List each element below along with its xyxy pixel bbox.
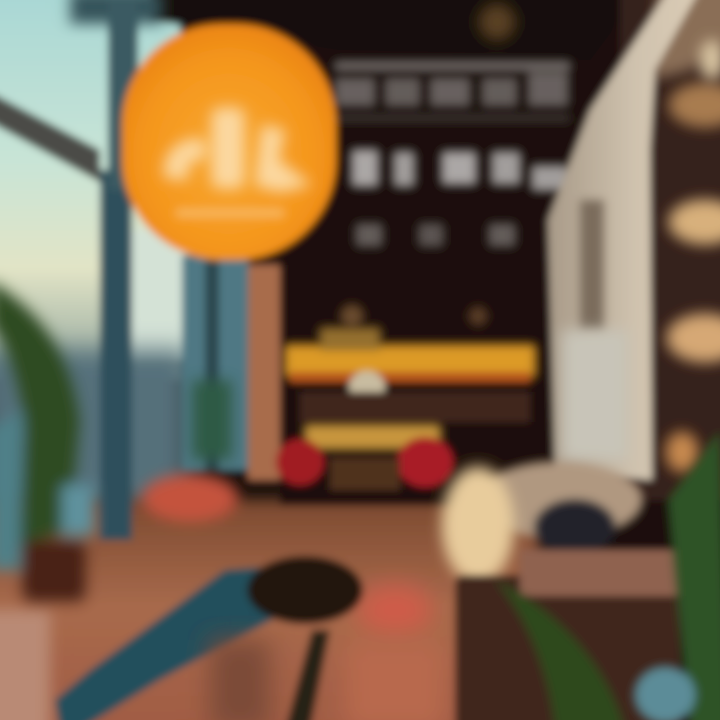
sign logo marks xyxy=(164,108,312,192)
right shelves xyxy=(620,0,720,500)
left plant xyxy=(0,280,94,602)
foreground plants xyxy=(495,430,720,720)
ceiling xyxy=(150,0,650,60)
floor xyxy=(0,500,540,720)
window columns xyxy=(182,255,280,480)
sign lettering marks xyxy=(335,62,570,246)
diagonal beam xyxy=(0,92,100,182)
window: sky on the left xyxy=(0,0,190,510)
brown sofa foreground xyxy=(455,550,680,720)
white armchair xyxy=(442,462,642,583)
round orange sign xyxy=(122,24,336,260)
blue column xyxy=(70,0,162,540)
back bar xyxy=(276,265,550,505)
red chairs xyxy=(276,437,453,487)
teal foreground bench xyxy=(55,556,363,720)
right cream column xyxy=(548,0,705,480)
